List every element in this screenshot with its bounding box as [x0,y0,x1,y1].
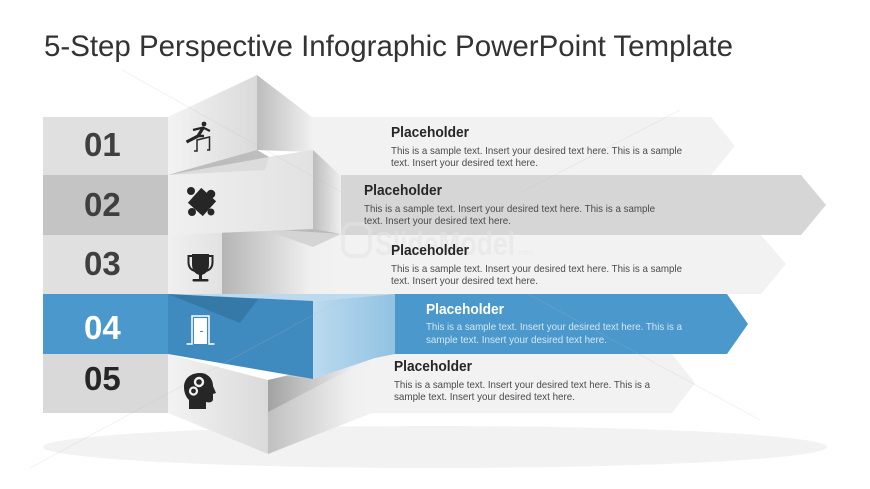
perspective block 3 [168,227,341,294]
number 05: 05 [84,360,121,397]
arrow 4 [395,294,748,354]
text: step 2: Placeholder [364,182,442,199]
perspective block 2 [168,150,341,235]
icon: door [186,316,214,344]
ground shadow [43,426,827,468]
icon: hurdle runner [186,122,210,151]
icon: trophy [188,254,212,282]
number 02: 02 [84,186,121,223]
text: step 1: This is a sample text. Insert your desired text here. This is a sample [391,146,682,157]
number 04: 04 [84,309,121,346]
watermark: SlideModel [375,225,515,262]
step 02 box [43,175,168,235]
text: step 1: text. Insert your desired text here. [391,158,538,169]
arrow 2 [341,175,826,235]
text: step 2: text. Insert your desired text here. [364,216,511,227]
step 05 box [43,354,168,413]
perspective block 5 [168,354,374,454]
text: step 3 [391,242,682,287]
number 01: 01 [84,126,121,163]
arrow 3 [330,235,786,294]
arrow 1 [312,117,735,175]
text: step 4: sample text. Insert your desired text here. [426,335,607,346]
perspective block 4 [168,294,395,379]
text: step 2 [364,182,655,227]
arrow 5 [366,354,695,413]
step 03 box [43,235,168,294]
text: step 5: This is a sample text. Insert your desired text here. This is a [394,380,650,391]
text: step 5: sample text. Insert your desired text here. [394,392,575,403]
icon: head with gears [184,373,216,409]
text: step 1: Placeholder [391,124,469,141]
step 04 box [43,294,168,354]
text: step 5: Placeholder [394,358,472,375]
number column [43,117,168,413]
step 01 box [43,117,168,175]
watermark: .com [516,248,534,257]
faint background lines [30,70,760,468]
perspective block 1 [168,75,312,175]
number 03: 03 [84,245,121,282]
text: step 2: This is a sample text. Insert your desired text here. This is a sample [364,204,655,215]
text: step 4: Placeholder [426,301,504,318]
title: 5-Step Perspective Infographic PowerPoint Template [44,30,733,63]
text: step 3: text. Insert your desired text here. [391,276,538,287]
text: step 3: This is a sample text. Insert your desired text here. This is a sample [391,264,682,275]
text: step 5 [394,358,650,403]
text: step 3: Placeholder [391,242,469,259]
icon: puzzle piece [187,187,216,216]
text: step 1 [391,124,682,169]
text: step 4: This is a sample text. Insert your desired text here. This is a [426,322,682,333]
text: step 4 [426,301,682,346]
